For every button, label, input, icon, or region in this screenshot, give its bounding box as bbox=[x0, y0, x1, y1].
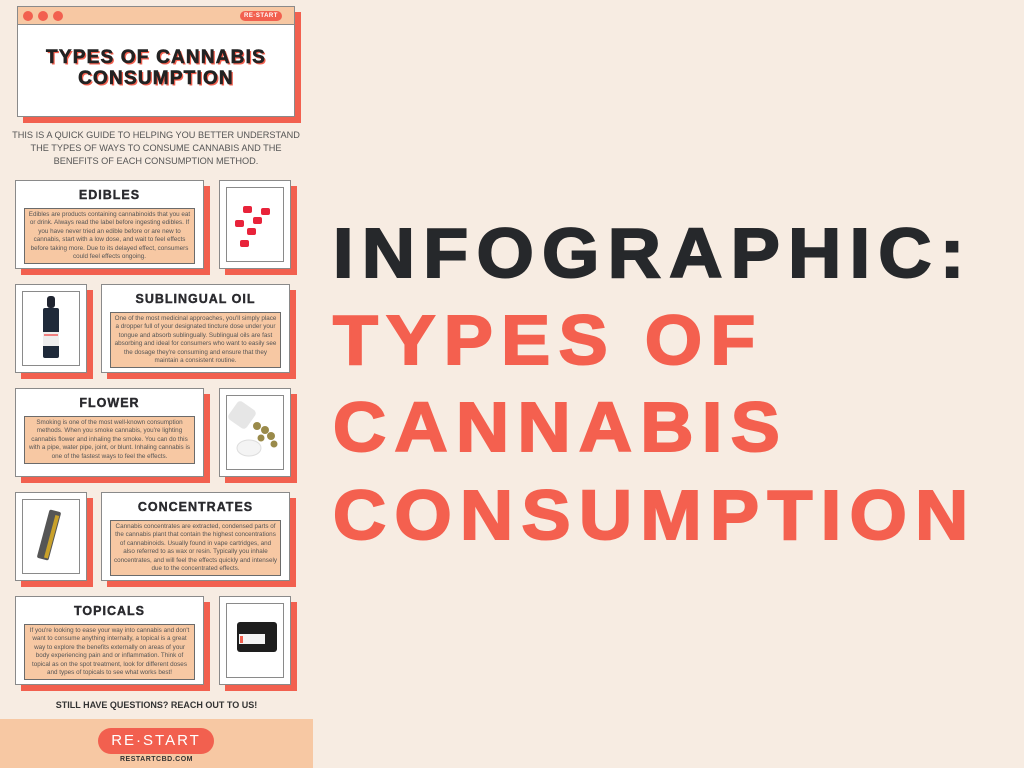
title line 2: TYPES OF bbox=[333, 301, 764, 379]
panel: concentrates: Cannabis concentrates are extracted, condensed parts of the cannabis plant that contain the highest concentrations of cannabinoids. Usually found in vape cartridges, and also referred to as wax or resin. Typically you inhale concentrates, and will feel the effects quickly and intensely due to the concentrated effects. bbox=[114, 523, 277, 572]
header title bbox=[46, 47, 266, 89]
title line 4: CONSUMPTION bbox=[333, 476, 977, 554]
main title bbox=[332, 214, 977, 554]
header title: CONSUMPTION bbox=[78, 68, 234, 89]
icon: flower jar bbox=[219, 388, 291, 477]
re-start badge bbox=[240, 11, 282, 21]
footer bbox=[0, 719, 313, 768]
header title: TYPES OF CANNABIS bbox=[46, 47, 266, 68]
panel: edibles bbox=[15, 180, 204, 269]
panel: sublingual oil bbox=[101, 284, 290, 373]
panel: topicals: TOPICALS bbox=[74, 604, 145, 618]
panel: sublingual oil: One of the most medicinal approaches, you'll simply place a dropper full of your designated tincture dose under your tongue and absorb sublingually. Sublingual oils are fast absorbing and ideal for consumers who want to easily see the dosage they're consuming and ensure that they maintain a consistent routine. bbox=[115, 315, 276, 364]
icon: oil dropper bbox=[15, 284, 87, 373]
panel: topicals: If you're looking to ease your way into cannabis and don't want to consume anything internally, a topical is a great way to explore the benefits externally on areas of your body experiencing pain and or inflammation. Think of topical as on the spot treatment, look for different doses and types of topicals to see what works best! bbox=[30, 627, 189, 676]
panel: concentrates bbox=[101, 492, 290, 581]
panel: flower bbox=[15, 388, 204, 477]
panel: flower: FLOWER bbox=[79, 396, 140, 410]
website: RESTARTCBD.COM bbox=[120, 756, 193, 763]
panel: flower: Smoking is one of the most well-known consumption methods. When you smoke cannabis, you're lighting cannabis flower and inhaling the smoke. You can do this with a pipe, water pipe, joint, or blunt. Inhaling cannabis is one of the fastest ways to feel the effects. bbox=[29, 419, 190, 460]
header window bbox=[17, 6, 295, 117]
call to action: STILL HAVE QUESTIONS? REACH OUT TO US! bbox=[56, 700, 257, 710]
panel: topicals bbox=[15, 596, 204, 685]
panel: edibles: Edibles are products containing cannabinoids that you eat or drink. Always read the label before ingesting edibles. If you have never tried an edible before or are new to cannabis, start with a low dose, and wait to feel effects before taking more. Due to its delayed effect, consumers could feel effects ongoing. bbox=[29, 211, 190, 260]
subtitle: THIS IS A QUICK GUIDE TO HELPING YOU BETTER UNDERSTAND THE TYPES OF WAYS TO CONSUME CANNABIS AND THE BENEFITS OF EACH CONSUMPTION METHOD. bbox=[12, 130, 300, 166]
title line 1: INFOGRAPHIC: bbox=[333, 214, 973, 292]
logo pill bbox=[98, 728, 214, 754]
panel: sublingual oil: SUBLINGUAL OIL bbox=[135, 292, 256, 306]
re-start badge: RE·START bbox=[244, 13, 278, 19]
title line 3: CANNABIS bbox=[333, 388, 788, 466]
icon: vape cartridge bbox=[15, 492, 87, 581]
header bar bbox=[18, 7, 294, 25]
logo pill: RE·START bbox=[111, 732, 201, 749]
icon: gummies bbox=[219, 180, 291, 269]
panel: concentrates: CONCENTRATES bbox=[138, 500, 253, 514]
panel: edibles: EDIBLES bbox=[79, 188, 140, 202]
icon: topical jar bbox=[219, 596, 291, 685]
